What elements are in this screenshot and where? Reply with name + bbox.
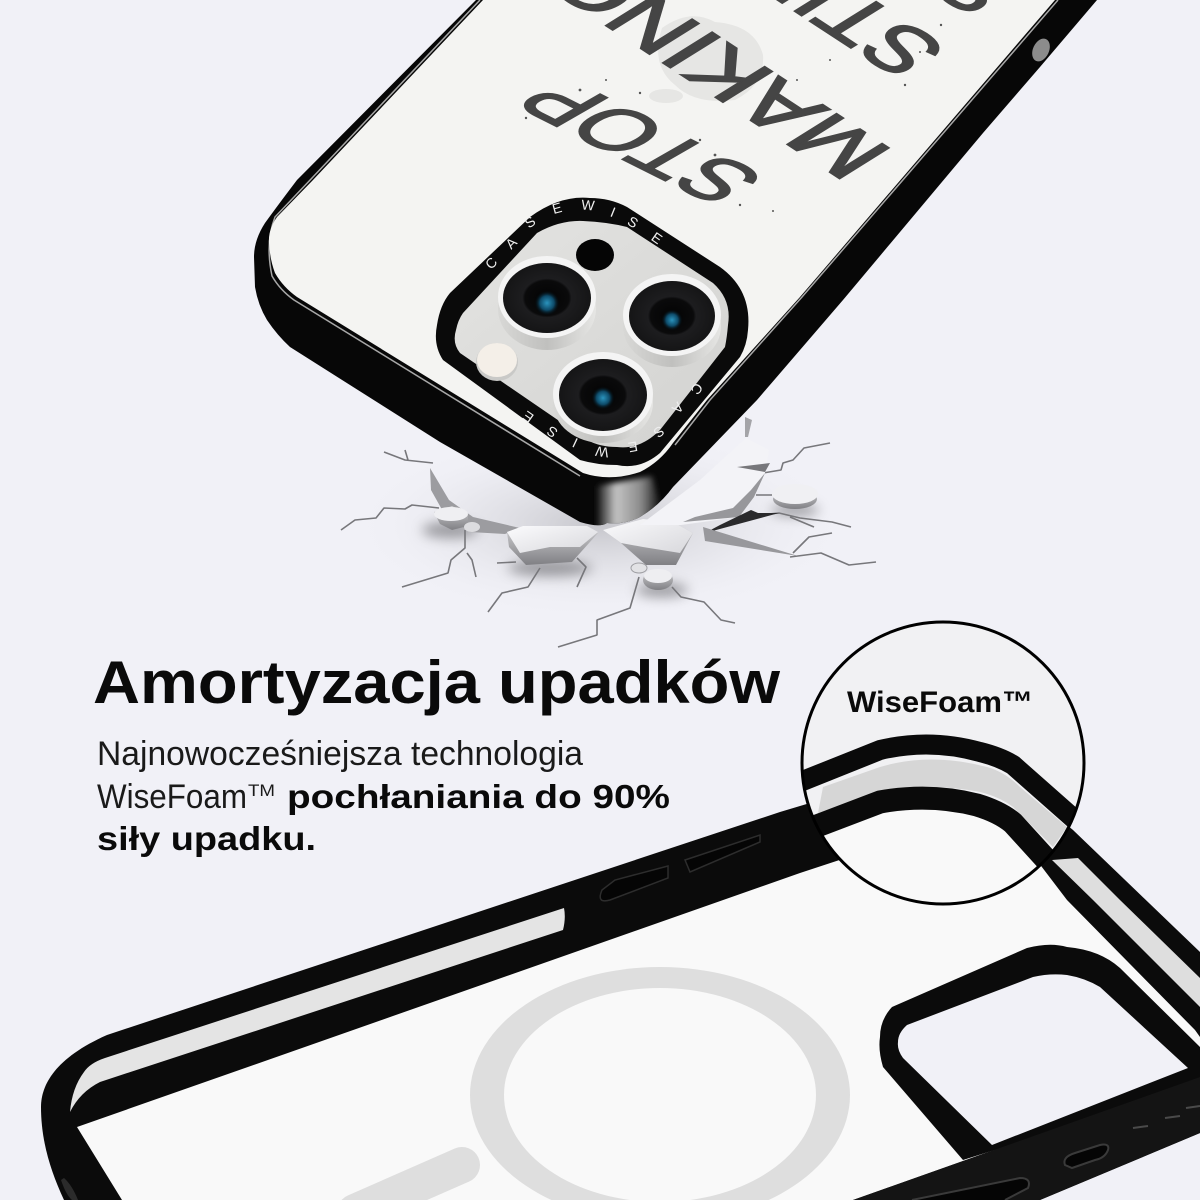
- title: Amortyzacja upadków: [93, 649, 780, 716]
- illustration: cracked ground: [341, 417, 876, 647]
- rim reflection: [269, 0, 1058, 476]
- brand text on ring: A: [502, 234, 520, 252]
- description: siły upadku.: [97, 820, 316, 857]
- brand text on ring: S: [625, 213, 641, 231]
- lens 2: [623, 274, 721, 367]
- lens 1: [498, 256, 596, 350]
- magsafe ring: [470, 967, 850, 1200]
- description: Najnowocześniejsza technologia: [97, 735, 583, 773]
- lower rail: [853, 1077, 1200, 1200]
- camera cutout frame: [879, 945, 1200, 1160]
- crack soft shadow: [350, 430, 850, 620]
- brand text on ring: E: [627, 438, 639, 456]
- brand text on ring: E: [550, 199, 564, 217]
- left side hole: [61, 1178, 78, 1200]
- chunk contact shadows: [422, 504, 819, 597]
- phone: inside of case: [41, 770, 1200, 1200]
- center right chunk: [603, 519, 693, 565]
- description: TM: [248, 781, 275, 800]
- crack lines: [341, 443, 876, 647]
- side slot top rail: [70, 908, 565, 1112]
- magnifier label: WiseFoam™: [847, 686, 1033, 719]
- case black frame: [41, 770, 1200, 1200]
- small lower chunks: [631, 563, 673, 590]
- brand text on ring: A: [668, 399, 687, 417]
- description: [97, 735, 670, 857]
- right plate rim: [640, 417, 798, 556]
- camera island ring: [436, 198, 748, 466]
- brand text on ring: S: [544, 423, 560, 441]
- brand text on ring: S: [522, 213, 538, 231]
- brand text on ring: S: [651, 423, 667, 441]
- brand text on ring: E: [649, 229, 665, 247]
- magnified frame detail: [804, 734, 1076, 866]
- rail ports: [912, 1106, 1200, 1200]
- camera island opening: [455, 221, 729, 447]
- side slot right rail: [1052, 858, 1200, 1007]
- phone: top case with camera: [254, 0, 1097, 530]
- brand text on ring: W: [581, 196, 596, 214]
- brand text on ring: [482, 196, 706, 461]
- magsafe pill: [355, 1165, 462, 1200]
- brand text on ring: E: [520, 408, 536, 426]
- paint speckles: [525, 24, 942, 212]
- brand text on ring: C: [688, 380, 706, 398]
- back print lettering: STOP: [497, 66, 784, 216]
- case back panel: [269, 0, 1055, 477]
- brand text on ring: I: [608, 204, 618, 220]
- lens 3: [553, 352, 653, 443]
- magnifier background: [802, 622, 1084, 904]
- description: pochłaniania do 90%: [287, 778, 670, 815]
- center left chunk: [507, 526, 598, 565]
- side button highlight: [1029, 36, 1053, 64]
- small left chunk: [434, 506, 480, 532]
- magnifier outline: [802, 622, 1084, 904]
- bottom corner reflection: [597, 476, 660, 530]
- brand text on ring: I: [570, 435, 580, 451]
- flash: [476, 343, 518, 381]
- mic hole: [576, 239, 614, 271]
- magnifier callout: [800, 620, 1086, 906]
- inner clear panel: [77, 812, 1200, 1200]
- small right chunk: [772, 484, 818, 509]
- left rim wedge: [430, 468, 520, 534]
- brand text on ring: W: [594, 443, 610, 461]
- description: WiseFoam: [97, 778, 247, 816]
- back print lettering: [497, 0, 1038, 216]
- apple logo ghost: [649, 16, 763, 103]
- brand text on ring: C: [482, 254, 500, 272]
- case black frame: [254, 0, 1097, 525]
- camera cutout opening: [898, 974, 1188, 1145]
- side buttons: [600, 835, 760, 901]
